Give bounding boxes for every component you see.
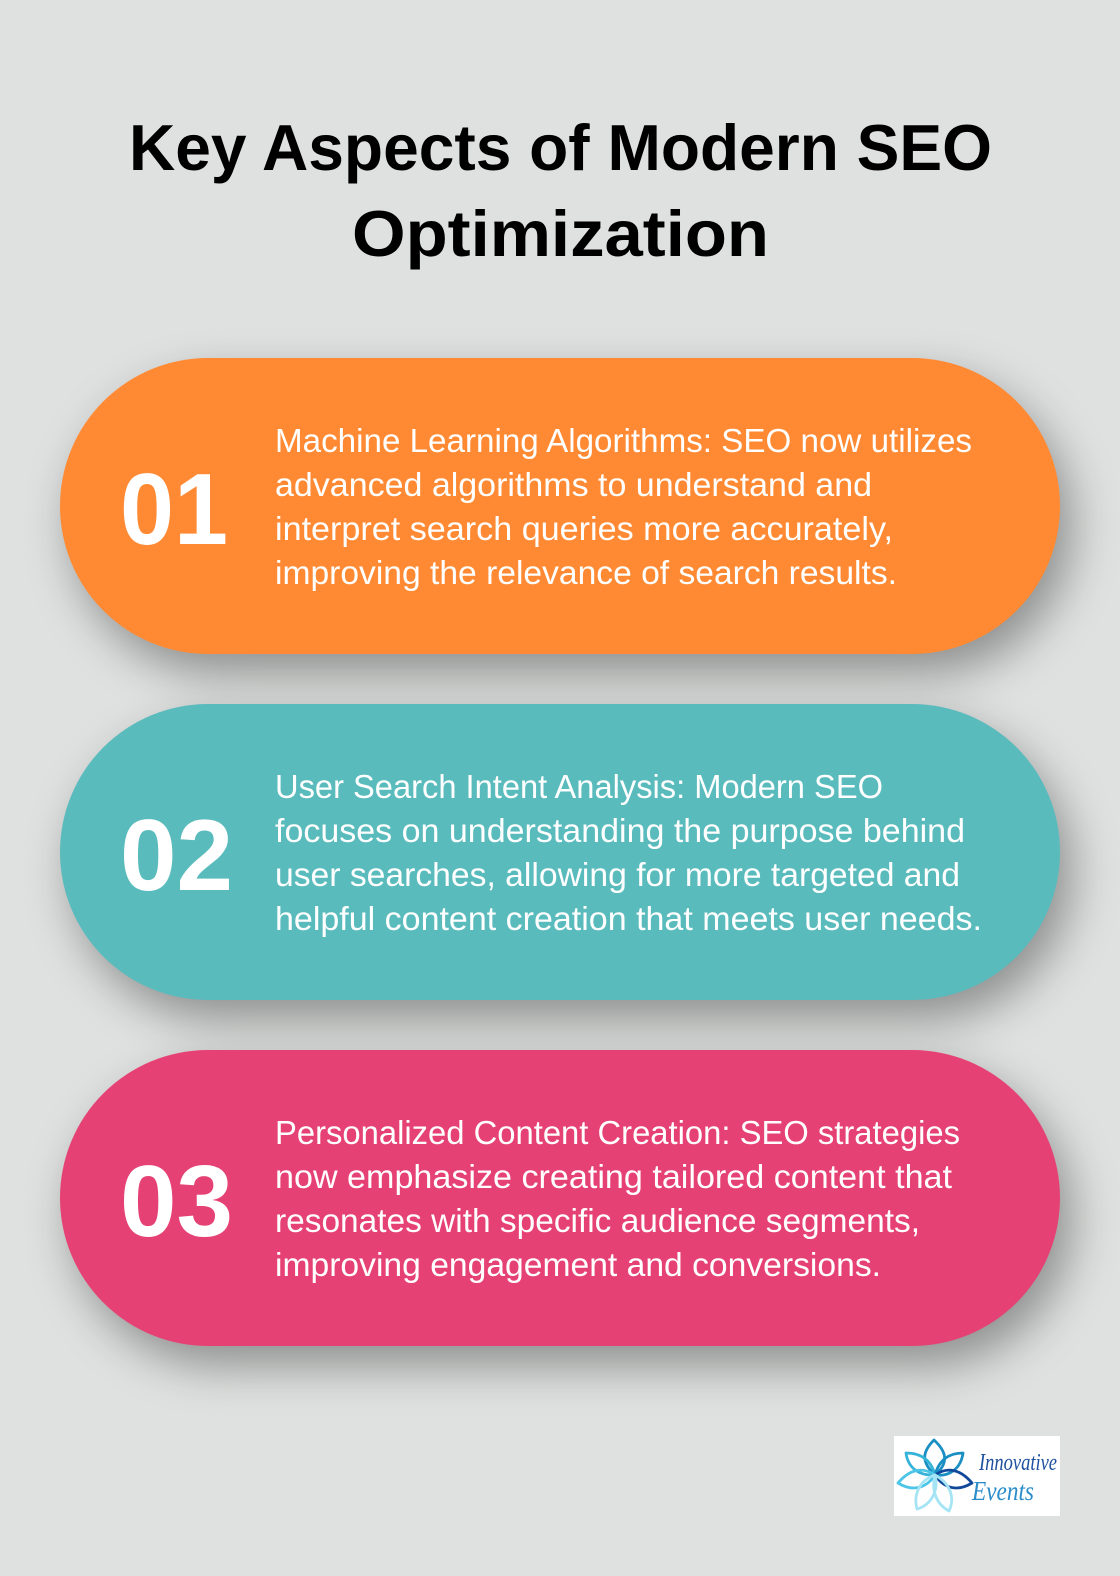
number 03: 03 [120, 1146, 233, 1258]
number 02: 02 [120, 800, 233, 912]
panel: personalized content creation [60, 1050, 1060, 1346]
logo wordmark [971, 1450, 1057, 1506]
body text: helpful content creation that meets user needs. [275, 900, 982, 937]
logo wordmark: Events [971, 1476, 1034, 1506]
body text: user searches, allowing for more targeted and [275, 856, 960, 893]
body text: Machine Learning Algorithms: SEO now utilizes [275, 422, 972, 459]
body text: now emphasize creating tailored content that [275, 1158, 952, 1195]
body text: focuses on understanding the purpose behind [275, 812, 965, 849]
icon: flower [898, 1440, 972, 1511]
body text: interpret search queries more accurately, [275, 510, 893, 547]
title: Optimization [352, 197, 769, 270]
body text: improving the relevance of search results. [275, 554, 897, 591]
panel: user search intent analysis [60, 704, 1060, 1000]
body text: resonates with specific audience segments, [275, 1202, 920, 1239]
number 01: 01 [120, 454, 228, 566]
body text: advanced algorithms to understand and [275, 466, 872, 503]
title [129, 111, 992, 270]
body text [275, 768, 982, 937]
body text [275, 422, 972, 591]
panel: machine learning algorithms [60, 358, 1060, 654]
title: Key Aspects of Modern SEO [129, 111, 992, 184]
logo: Innovative Events [894, 1436, 1060, 1516]
body text: improving engagement and conversions. [275, 1246, 881, 1283]
body text [275, 1114, 960, 1283]
body text: User Search Intent Analysis: Modern SEO [275, 768, 883, 805]
body text: Personalized Content Creation: SEO strategies [275, 1114, 960, 1151]
